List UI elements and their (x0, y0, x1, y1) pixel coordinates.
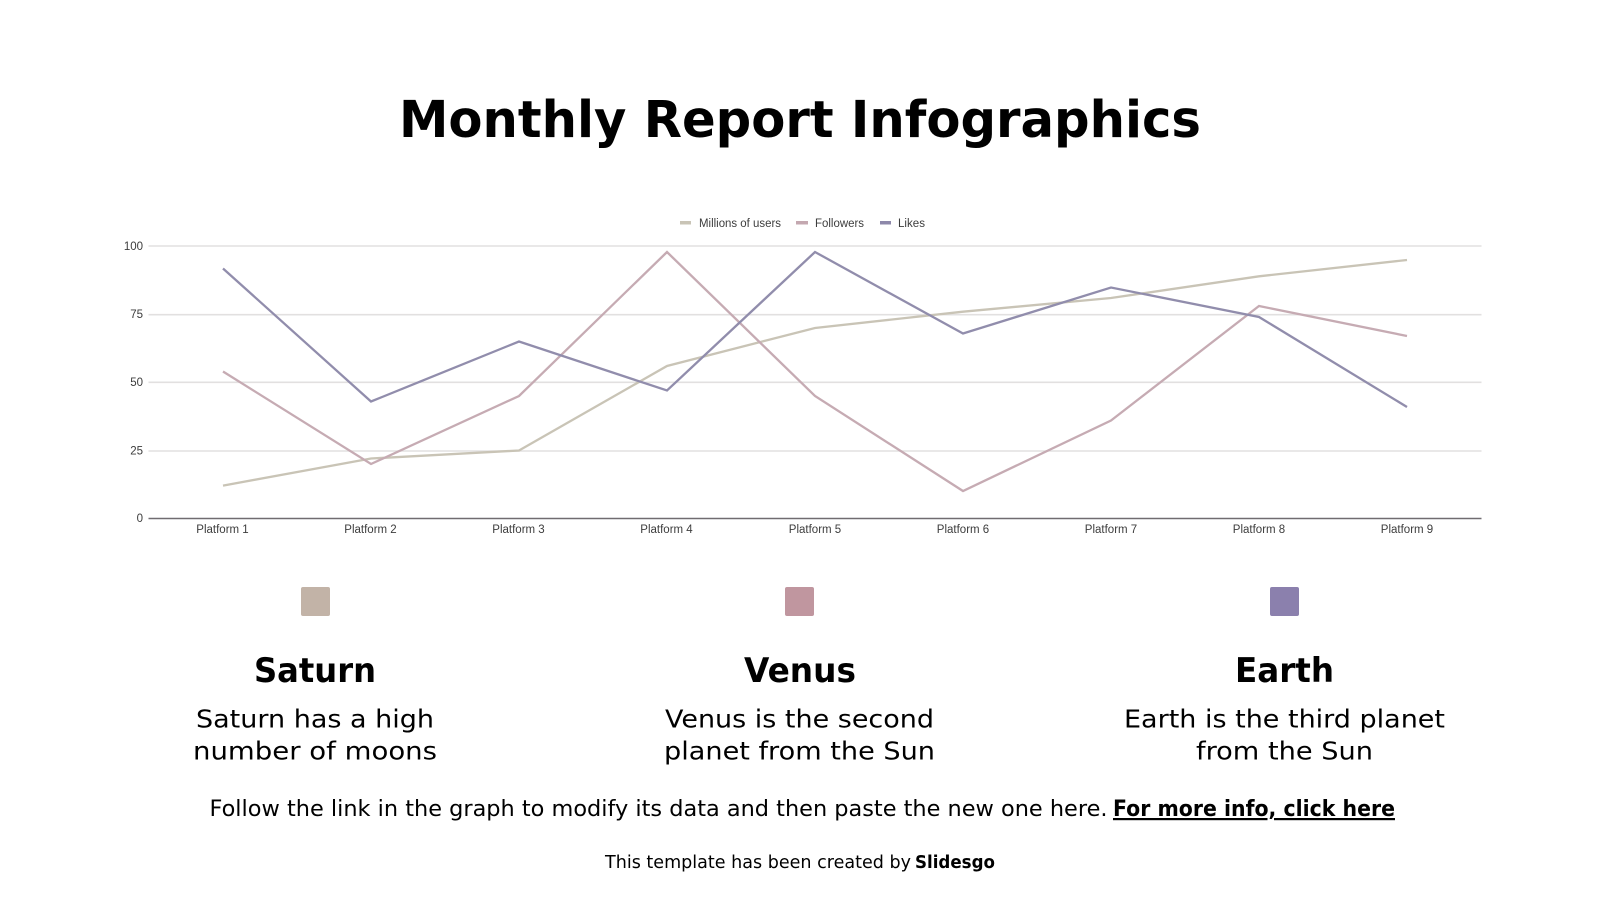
text: Earth description: from the Sun (1196, 736, 1373, 766)
text: instructions and link: Follow the link in the graph to modify its data and then paste the new one here. (210, 797, 1108, 822)
x axis labels: Platform 3 (492, 524, 545, 536)
chart legend: Likes (898, 218, 925, 230)
text: Saturn description (193, 704, 437, 766)
series: Likes (223, 252, 1407, 407)
panel: Venus (664, 587, 935, 766)
title: Monthly Report Infographics (399, 91, 1201, 150)
y axis labels: 50 (130, 377, 143, 389)
x axis labels: Platform 1 (196, 524, 249, 536)
icon: Earth swatch (1270, 587, 1299, 616)
x axis labels: Platform 8 (1233, 524, 1285, 536)
text: credit: Slidesgo (915, 852, 995, 873)
text: credit: This template has been created by (604, 852, 911, 873)
x axis labels: Platform 6 (937, 524, 989, 536)
text: Venus description: Venus is the second (665, 704, 934, 734)
y axis labels (124, 241, 143, 525)
chart legend (680, 218, 925, 230)
heading: Venus: Venus (744, 651, 856, 691)
text: Earth description (1124, 704, 1445, 766)
icon: Saturn swatch (301, 587, 330, 616)
y axis labels: 75 (130, 309, 143, 321)
x axis labels: Platform 5 (789, 524, 841, 536)
x axis labels (196, 524, 1433, 536)
y axis labels: 100 (124, 241, 143, 253)
text: instructions and link: For more info, click here (1113, 797, 1395, 822)
text: Saturn description: number of moons (193, 736, 437, 766)
chart legend: Millions of users (699, 218, 781, 230)
series: Followers (223, 252, 1407, 491)
icon: Venus swatch (785, 587, 814, 616)
text: Venus description (664, 704, 935, 766)
heading: Earth: Earth (1235, 651, 1334, 691)
panel: Saturn (193, 587, 437, 766)
y axis labels: 0 (137, 513, 143, 525)
panel: Earth (1124, 587, 1445, 766)
x axis labels: Platform 7 (1085, 524, 1137, 536)
line chart (124, 218, 1482, 536)
y axis labels: 25 (130, 446, 143, 458)
x axis labels: Platform 2 (344, 524, 397, 536)
text: Earth description: Earth is the third planet (1124, 704, 1445, 734)
x axis labels: Platform 4 (640, 524, 693, 536)
text: Venus description: planet from the Sun (664, 736, 935, 766)
text: Saturn description: Saturn has a high (196, 704, 434, 734)
x axis labels: Platform 9 (1381, 524, 1433, 536)
series: Millions of users (223, 260, 1407, 486)
chart legend: Followers (815, 218, 864, 230)
heading: Saturn: Saturn (254, 651, 376, 691)
